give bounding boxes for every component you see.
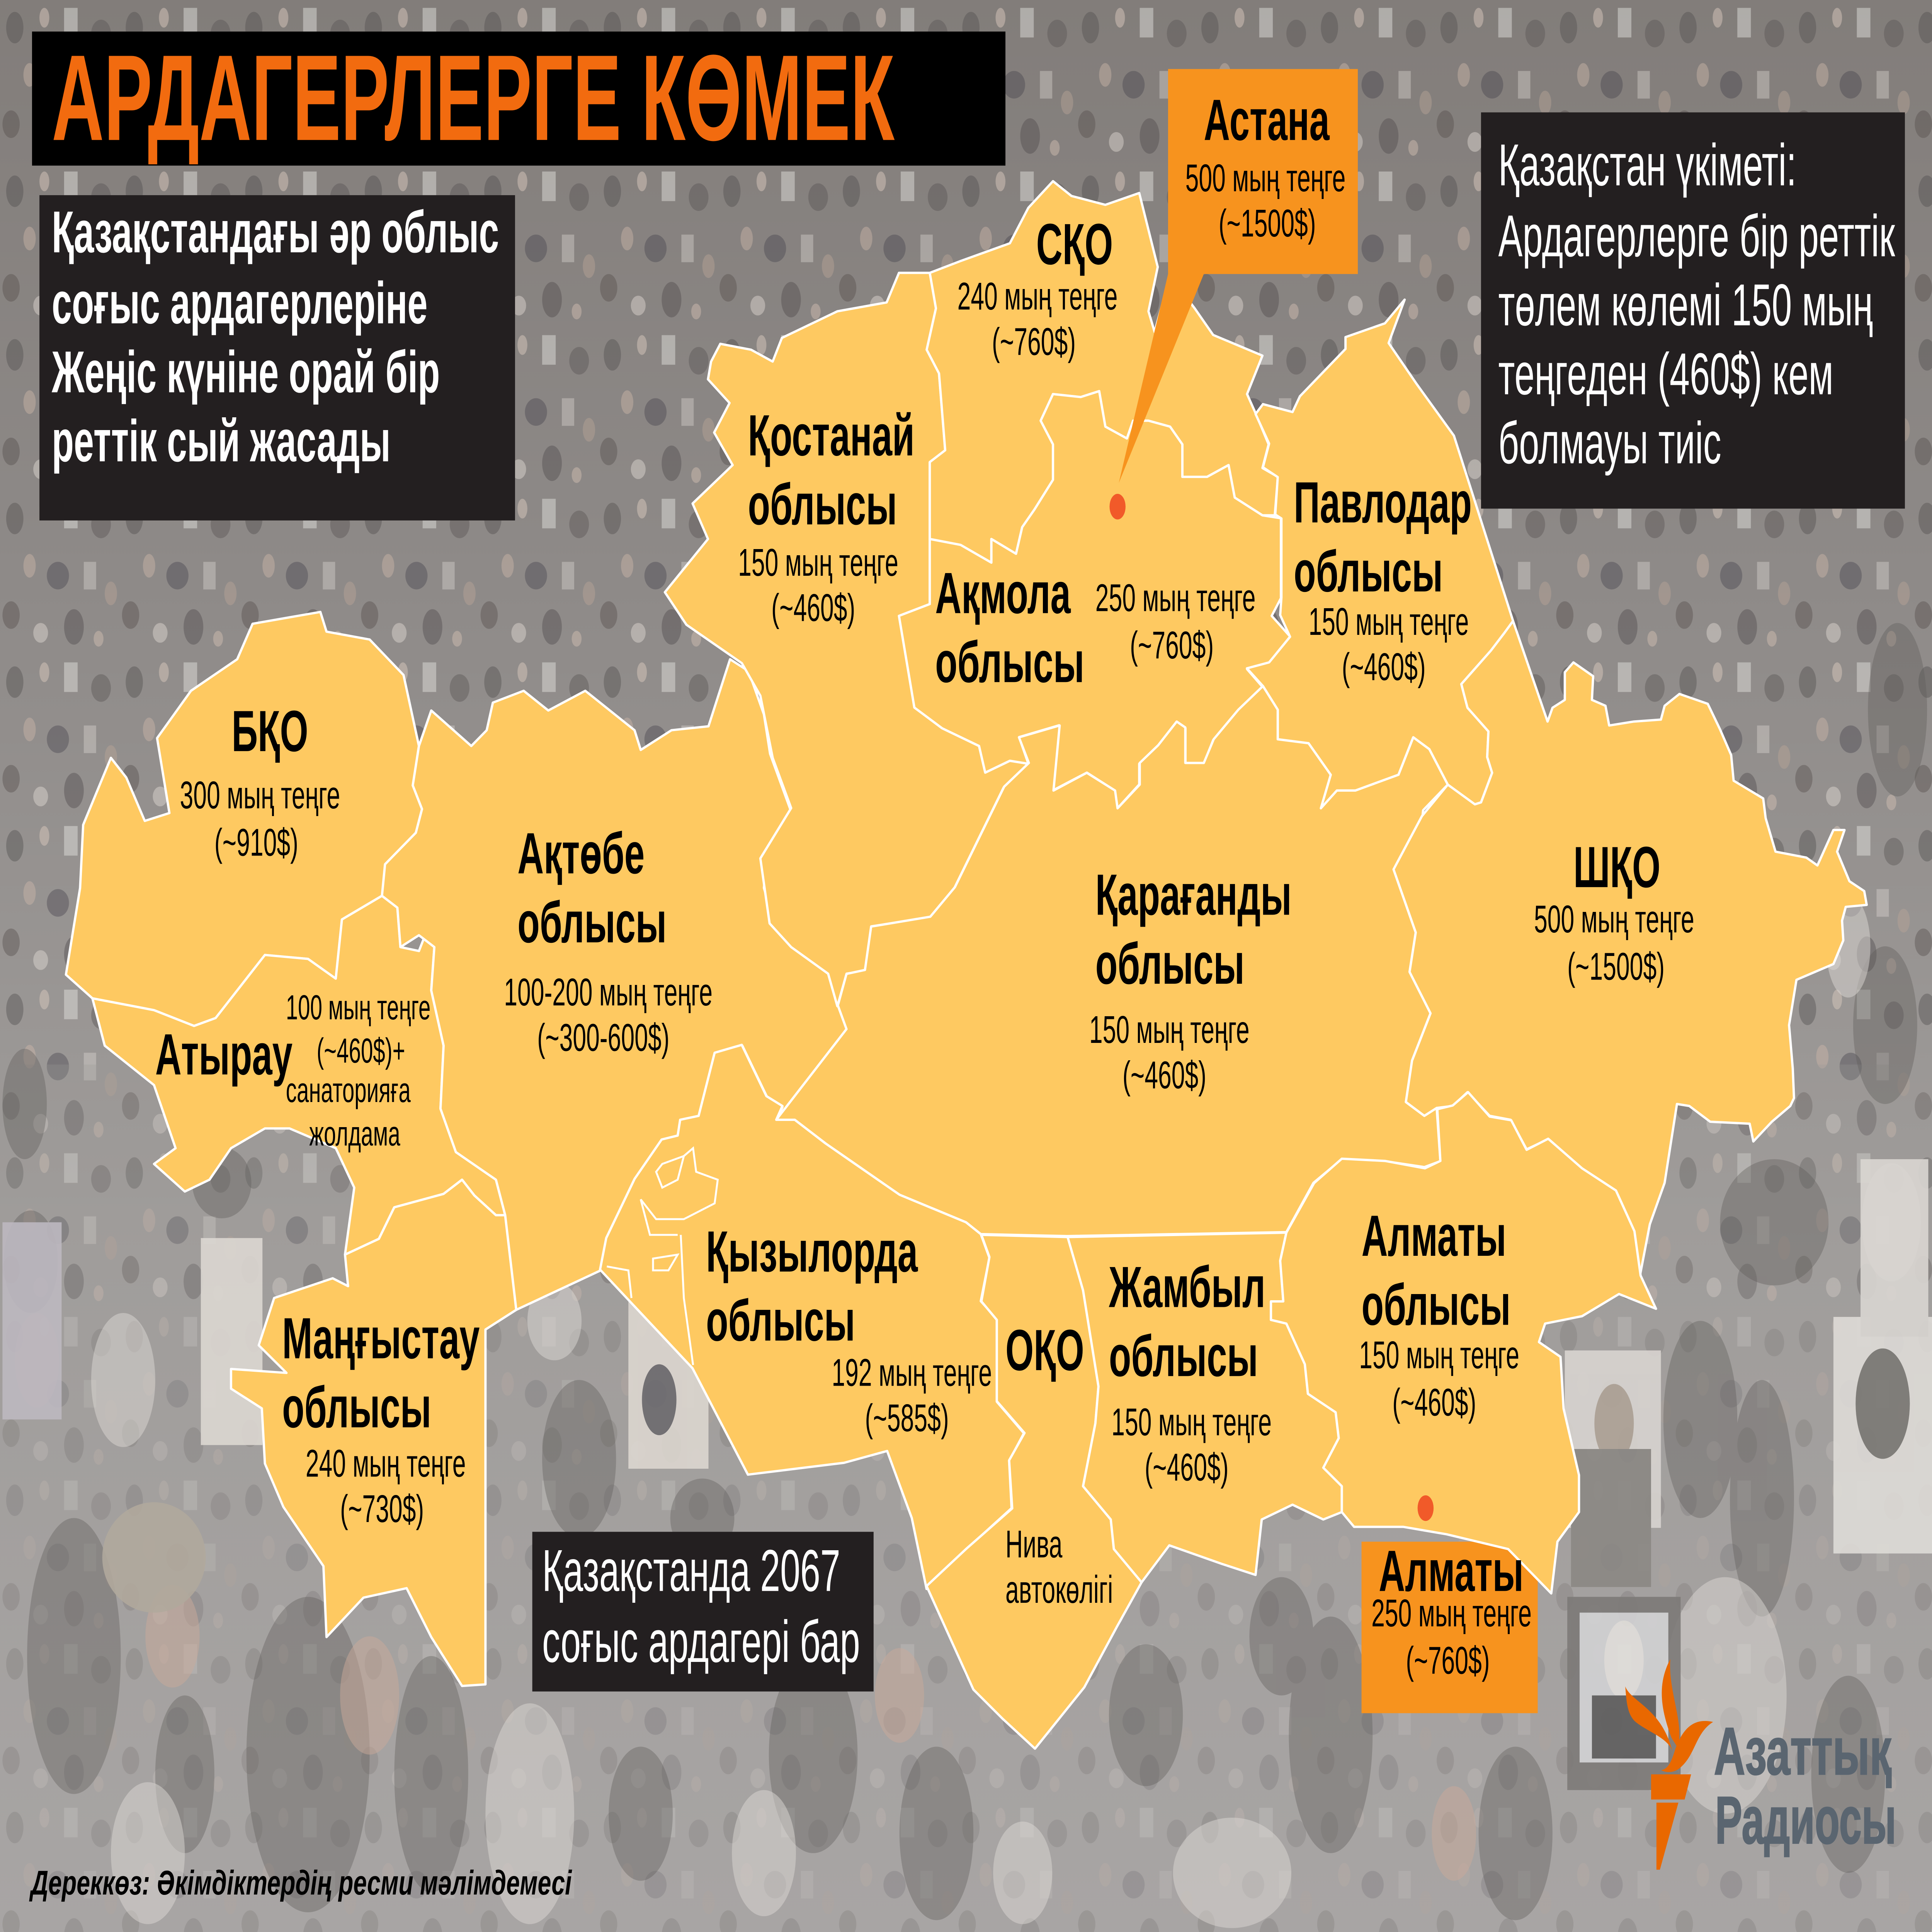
label: Aktobe (504, 820, 713, 1059)
region: Almaty (1271, 1092, 1656, 1594)
label: Zhambyl: 150 мың теңге (1111, 1400, 1272, 1444)
label: Atyrau: (~460$)+ (317, 1031, 405, 1070)
region: North Kazakhstan (927, 181, 1278, 563)
logo: Azattyq Radiosy: Радиосы (1715, 1782, 1896, 1858)
title bar: АРДАГЕРЛЕРГЕ КӨМЕК (52, 29, 896, 166)
label: BKO (180, 698, 340, 864)
label: Kyzylorda (706, 1219, 992, 1440)
region: Akmola (899, 391, 1290, 808)
text box: government statement: болмауы тиіс (1498, 410, 1721, 476)
text box: government statement: Ардагерлерге бір реттік (1498, 203, 1895, 269)
text box: government statement (1481, 112, 1905, 509)
region: Kostanay (665, 273, 1028, 1006)
Aral sea outlines (607, 1148, 718, 1365)
label: Zhambyl: (~460$) (1145, 1446, 1229, 1489)
label: Akmola: Ақмола (935, 560, 1071, 626)
label: Aktobe: облысы (517, 889, 667, 955)
label: Almaty city: 250 мың теңге (1371, 1592, 1532, 1635)
label: Karaganda: (~460$) (1122, 1053, 1206, 1097)
label: Pavlodar: облысы (1294, 539, 1443, 604)
label: North Kazakhstan: (~760$) (992, 320, 1076, 363)
region: Pavlodar (1247, 300, 1513, 808)
text box: government statement: төлем көлемі 150 мың (1498, 272, 1873, 338)
label: Aktobe: (~300-600$) (537, 1016, 670, 1059)
label: North Kazakhstan (957, 211, 1117, 363)
label: Pavlodar: 150 мың теңге (1308, 600, 1469, 643)
label: Almaty region: (~460$) (1392, 1381, 1476, 1424)
text box: regions give one-time gift: Жеңіс күніне орай бір (51, 339, 440, 405)
label: BKO: 300 мың теңге (180, 774, 340, 816)
label: Zhambyl: Жамбыл (1109, 1254, 1265, 1320)
text box: veteran count (532, 1532, 874, 1692)
label: East Kazakhstan: ШҚО (1573, 834, 1660, 900)
label: South Kazakhstan: Нива (1005, 1523, 1063, 1566)
label: North Kazakhstan: 240 мың теңге (957, 275, 1117, 318)
label: East Kazakhstan: 500 мың теңге (1534, 898, 1694, 941)
label: Aktobe: 100-200 мың теңге (504, 971, 713, 1014)
label: Almaty region: Алматы (1362, 1203, 1506, 1268)
label: Akmola: облысы (935, 629, 1084, 695)
region: Atyrau (92, 896, 505, 1255)
marker: Almaty (1418, 1495, 1434, 1521)
label: Kostanay: (~460$) (771, 586, 855, 629)
text box: veteran count: соғыс ардагері бар (542, 1609, 860, 1675)
label: Kyzylorda: (~585$) (865, 1396, 949, 1440)
label: Kostanay: облысы (748, 471, 897, 537)
label: Karaganda: облысы (1095, 931, 1245, 996)
region: Aktobe (382, 659, 847, 1310)
label: Mangystau: Маңғыстау (282, 1306, 480, 1371)
label: Karaganda: 150 мың теңге (1089, 1008, 1250, 1051)
region: South Kazakhstan (927, 1235, 1141, 1749)
callout: Astana (1119, 69, 1358, 483)
label: South Kazakhstan: ОҚО (1005, 1317, 1084, 1383)
source line: Дереккөз: Әкімдіктердің ресми мәлімдемесі (29, 1864, 572, 1902)
label: Aktobe: Ақтөбе (517, 820, 645, 886)
label: North Kazakhstan: СҚО (1036, 211, 1113, 277)
box: Almaty city (behind map) (1362, 1542, 1538, 1713)
label: Almaty region: 150 мың теңге (1359, 1333, 1519, 1376)
label: Akmola: 250 мың теңге (1095, 577, 1256, 619)
region: Karaganda (776, 686, 1448, 1236)
label: Mangystau: облысы (282, 1374, 431, 1440)
label: Atyrau: санаторияға (286, 1070, 411, 1109)
label: Mangystau (282, 1306, 480, 1530)
label: Atyrau: жолдама (309, 1114, 400, 1153)
label: Almaty city: (~760$) (1406, 1639, 1490, 1682)
region: BKO (66, 612, 422, 1026)
label: Kyzylorda: 192 мың теңге (832, 1351, 992, 1394)
label: Kostanay (738, 403, 915, 629)
region: Kyzylorda (600, 1045, 1024, 1589)
label: South Kazakhstan (1005, 1317, 1113, 1611)
label: Kostanay: 150 мың теңге (738, 541, 898, 584)
region: Mangystau (231, 1180, 516, 1686)
logo: Azattyq Radiosy (1625, 1659, 1896, 1870)
text box: regions give one-time gift: реттік сый жасады (52, 408, 391, 474)
label: Mangystau: 240 мың теңге (306, 1442, 466, 1485)
label: BKO: БҚО (231, 698, 308, 764)
label: Zhambyl (1109, 1254, 1272, 1489)
label: Mangystau: (~730$) (340, 1487, 424, 1530)
map of Kazakhstan (66, 181, 1867, 1749)
callout: Astana: Астана (1204, 87, 1330, 153)
label: South Kazakhstan: автокөлігі (1005, 1568, 1113, 1611)
label: East Kazakhstan: (~1500$) (1567, 945, 1665, 988)
marker: Astana (1109, 494, 1126, 519)
label: Karaganda (1089, 862, 1292, 1097)
icon: torch flame (1625, 1659, 1713, 1870)
text box: veteran count: Қазақстанда 2067 (542, 1537, 840, 1604)
text box: government statement: теңгеден (460$) кем (1498, 341, 1833, 407)
label: Almaty city: Алматы (1379, 1538, 1524, 1604)
label: Almaty region (1359, 1203, 1519, 1424)
label: Pavlodar (1294, 469, 1472, 689)
label: East Kazakhstan (1534, 834, 1694, 988)
region: East Kazakhstan (1394, 621, 1867, 1276)
label: Kostanay: Қостанай (748, 403, 915, 468)
region: Zhambyl (1068, 1233, 1342, 1582)
label: Karaganda: Қарағанды (1095, 862, 1292, 927)
label: Kyzylorda: Қызылорда (706, 1219, 918, 1284)
label: Pavlodar: (~460$) (1342, 645, 1426, 689)
label: Atyrau: 100 мың теңге (286, 988, 430, 1027)
callout: Astana: (~1500$) (1219, 202, 1316, 245)
text box: regions give one-time gift: Қазақстандағы әр облыс (52, 199, 499, 265)
label: Almaty city (1371, 1538, 1532, 1682)
label: Almaty region: облысы (1362, 1272, 1511, 1337)
text box: regions give one-time gift (39, 195, 515, 520)
label: BKO: (~910$) (214, 821, 298, 864)
label: Atyrau (155, 988, 430, 1153)
label: Zhambyl: облысы (1109, 1323, 1258, 1389)
callout: Astana: 500 мың теңге (1185, 156, 1345, 199)
label: Akmola: (~760$) (1130, 624, 1214, 667)
logo: Azattyq Radiosy: Азаттық (1714, 1714, 1891, 1789)
label: Kyzylorda: облысы (706, 1288, 855, 1353)
decorative portraits (2, 1159, 1932, 1790)
label: Atyrau: Атырау (155, 1022, 293, 1087)
text box: government statement: Қазақстан үкіметі: (1498, 132, 1796, 198)
label: Pavlodar: Павлодар (1294, 469, 1472, 535)
text box: regions give one-time gift: соғыс ардагерлеріне (52, 270, 428, 336)
label: Akmola (935, 560, 1256, 695)
